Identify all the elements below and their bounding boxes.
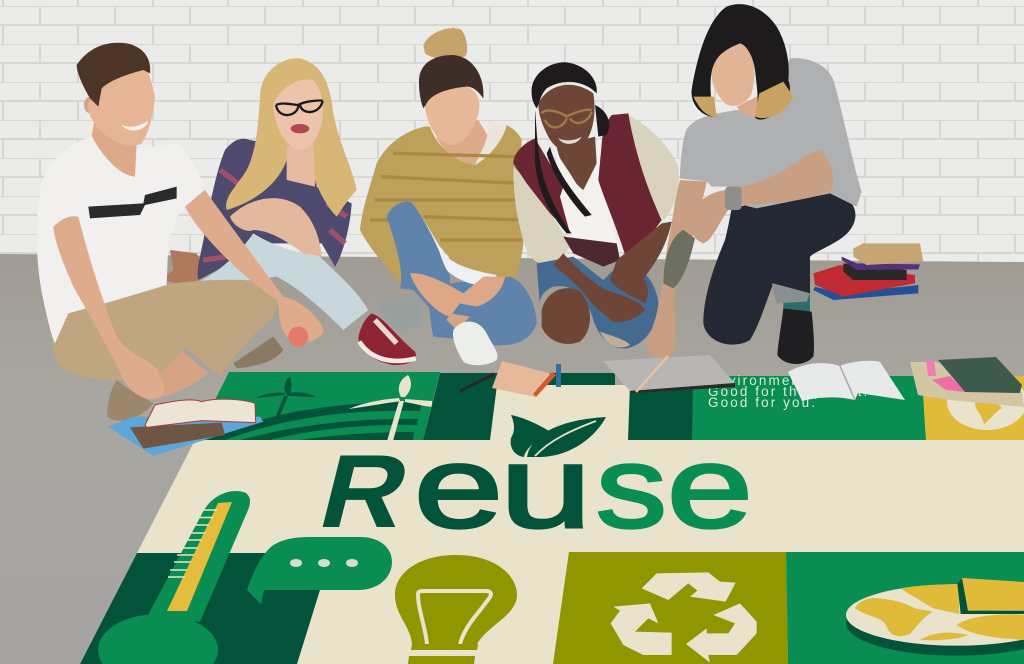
boot — [777, 308, 814, 364]
shoe patch — [600, 332, 630, 347]
slogan text: Good for the planet. — [708, 384, 869, 399]
white shirt — [557, 133, 617, 243]
panel: thermometer and chat — [80, 491, 392, 664]
smile — [122, 121, 148, 130]
blonde hair tips — [693, 82, 793, 118]
ankle — [160, 352, 208, 397]
icon: globe disc — [846, 578, 1024, 656]
open book on poster — [788, 361, 905, 401]
face — [273, 79, 323, 150]
neck — [557, 137, 597, 190]
plaid shirt — [198, 139, 352, 280]
waist — [563, 237, 620, 267]
panel: slogan — [692, 373, 926, 440]
hair — [419, 55, 483, 108]
title: Reuse — [309, 422, 753, 552]
icon: light bulb — [395, 555, 517, 664]
person 4: woman in maroon vest — [513, 62, 679, 349]
bun — [423, 28, 467, 59]
hair — [77, 43, 150, 107]
sweater — [360, 125, 524, 287]
hands — [410, 273, 505, 317]
icon: recycle arrows — [611, 572, 757, 663]
laptop — [603, 355, 735, 393]
bag behind — [160, 250, 200, 287]
pointing arm — [646, 180, 707, 363]
panel: dark green top blocks — [423, 373, 693, 440]
forearm right — [610, 222, 672, 303]
floor poster — [80, 372, 1024, 664]
panel: yellow globe — [922, 374, 1024, 440]
pen on poster — [460, 374, 494, 391]
ankle — [447, 313, 470, 330]
white shoe — [453, 322, 498, 365]
slogan text — [708, 373, 878, 410]
hills — [205, 402, 422, 440]
hair — [226, 58, 357, 217]
icon: thermometer — [98, 491, 250, 664]
knee — [542, 288, 590, 344]
orange notebook — [492, 361, 556, 397]
face — [425, 87, 479, 145]
books left on poster — [108, 399, 263, 456]
far shoe — [233, 337, 283, 368]
vest — [513, 138, 570, 233]
person 5: man in grey t-shirt — [646, 4, 862, 364]
person 1: man in white t-shirt — [37, 43, 324, 421]
icon: speech bubble — [247, 537, 392, 604]
near shoe — [107, 380, 153, 421]
neck — [92, 117, 137, 177]
jeans — [198, 233, 368, 330]
red sneaker — [358, 313, 416, 365]
title: Reuse: s — [596, 423, 667, 552]
sock — [783, 293, 810, 312]
face — [88, 63, 155, 146]
hair — [692, 4, 790, 120]
neck — [287, 140, 315, 187]
crumpled paper — [288, 327, 308, 347]
stack of notebooks right — [910, 357, 1024, 407]
icon: cream wind turbine — [349, 375, 432, 441]
books stack right of man — [813, 243, 923, 300]
person 3: woman in striped sweater — [360, 28, 537, 365]
title: Reuse: R — [309, 434, 421, 550]
tattoo — [663, 230, 695, 288]
cream sleeves — [513, 167, 572, 264]
icon: dark wind turbine — [256, 377, 316, 418]
arm reaching book — [53, 216, 164, 399]
person 2: blonde woman with glasses — [160, 58, 416, 365]
slogan text: Environment friendly. — [708, 373, 878, 388]
denim shorts — [537, 257, 658, 349]
grey shoe — [378, 296, 422, 330]
poster cream base — [80, 385, 1024, 664]
stripe — [88, 187, 177, 218]
icon: leaves — [511, 415, 606, 457]
braids — [535, 105, 609, 233]
face — [711, 43, 754, 106]
concrete floor — [0, 254, 1024, 664]
ear — [84, 97, 95, 113]
hand — [688, 190, 728, 243]
glasses — [542, 110, 592, 127]
smile — [558, 137, 582, 144]
mouth — [291, 124, 309, 133]
neck — [433, 120, 488, 165]
t-shirt — [37, 136, 205, 343]
glasses — [276, 101, 323, 115]
marker — [556, 364, 561, 387]
paper — [437, 242, 497, 287]
open book — [145, 399, 256, 427]
jeans cuff — [772, 283, 810, 303]
panel: wind turbines — [195, 372, 440, 441]
collar — [423, 122, 505, 165]
panel: recycle — [553, 552, 788, 664]
slogan text: Good for you. — [708, 395, 817, 410]
panel: green globe — [786, 552, 1024, 664]
title: Reuse: e — [414, 422, 503, 552]
black jeans — [703, 193, 855, 345]
hair top — [532, 62, 597, 108]
hands on knee — [230, 198, 322, 257]
pencil — [636, 356, 668, 392]
face — [538, 85, 595, 152]
title: Reuse: u — [500, 423, 592, 552]
watch — [725, 187, 742, 210]
grey t-shirt — [680, 58, 862, 208]
trousers — [52, 280, 278, 380]
arm reaching paper — [185, 190, 324, 342]
forearm left — [553, 253, 645, 322]
forearm — [730, 150, 833, 205]
title: Reuse: e — [667, 422, 753, 552]
neck — [737, 93, 763, 117]
jeans — [387, 201, 537, 345]
brick wall background — [0, 0, 1024, 262]
